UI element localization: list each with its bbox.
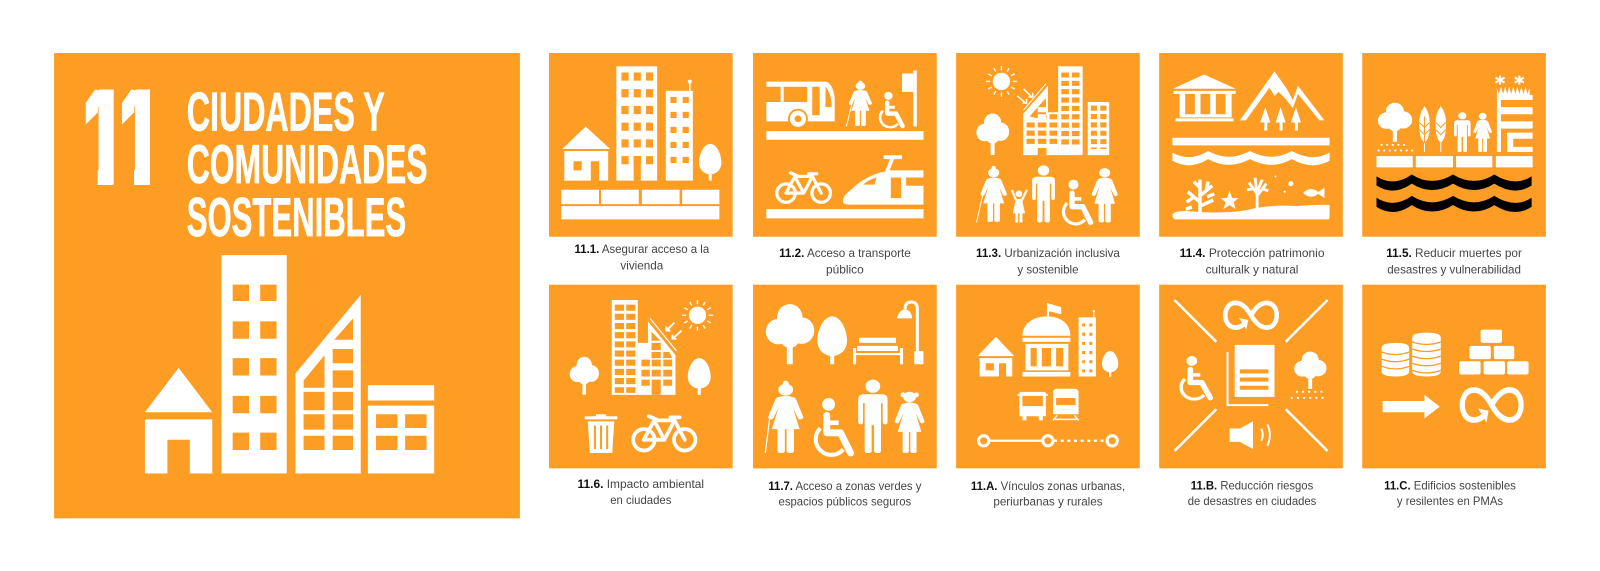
caption 11.7: 11.7. Acceso a zonas verdes y	[768, 480, 922, 493]
icon: wheelchair	[880, 92, 903, 127]
icon: speaker	[1230, 421, 1270, 449]
icon: train	[1053, 389, 1079, 420]
caption 11.1: 11.1. Asegurar acceso a la	[574, 243, 710, 256]
icon: trash bin	[585, 414, 617, 453]
icon: oval tree	[817, 316, 847, 364]
icon: star flowers	[1495, 76, 1524, 85]
icon: oval tree	[688, 358, 711, 395]
panel: 11.A	[956, 285, 1140, 468]
panel: 11.6	[549, 285, 733, 468]
icon: document	[1227, 345, 1274, 406]
icon: coral branch	[1247, 178, 1268, 209]
icon: arrow	[1383, 395, 1440, 418]
caption 11.B: 11.B. Reducción riesgos	[1191, 479, 1313, 492]
icon: capitol	[1022, 303, 1070, 377]
caption 11.3 line 2: y sostenible	[1017, 263, 1079, 276]
icon: fish	[1303, 188, 1324, 198]
icon: solar building	[612, 300, 677, 395]
icon: infinity	[1225, 303, 1277, 329]
icon: woman	[1092, 168, 1118, 222]
icon: woman with cane	[846, 81, 872, 127]
icon: man	[858, 380, 888, 453]
icon: city skyline	[145, 255, 434, 473]
icon: starfish	[1220, 191, 1239, 209]
icon: sun	[986, 66, 1017, 97]
icon: bus	[1017, 392, 1048, 420]
icon: house	[978, 337, 1014, 377]
icon: woman with cane	[765, 381, 803, 453]
icon: pavement	[561, 190, 719, 219]
icon: soil dots	[1378, 145, 1413, 151]
icon: apartment towers	[616, 66, 693, 181]
icon: street lamp	[897, 302, 923, 364]
icon: soil dots	[1291, 392, 1327, 398]
icon: tree	[699, 144, 721, 181]
icon: tree	[1294, 352, 1327, 389]
panel: 11.2	[753, 53, 937, 237]
icon: man	[1454, 112, 1471, 152]
icon: seabed	[1172, 205, 1330, 219]
icon: bus	[766, 82, 835, 129]
icon: woman	[1473, 113, 1492, 152]
panel: main goal 11	[54, 53, 520, 518]
icon: bench	[853, 338, 903, 364]
icon: train	[843, 157, 923, 205]
caption 11.C: 11.C. Edificios sostenibles	[1384, 479, 1516, 492]
icon: bricks	[1459, 330, 1529, 374]
heading: SOSTENIBLES	[187, 186, 406, 248]
caption 11.A: 11.A. Vínculos zonas urbanas,	[971, 480, 1125, 493]
caption 11.6: 11.6. Impacto ambiental	[578, 478, 704, 491]
caption 11.C line 2: y resilentes en PMAs	[1397, 495, 1503, 508]
heading: COMUNIDADES	[187, 133, 428, 195]
panel: 11.1	[549, 53, 733, 237]
icon: bus stop sign	[902, 70, 917, 127]
panel: 11.5	[1362, 53, 1546, 237]
caption 11.A line 2: periurbanas y rurales	[993, 496, 1103, 509]
icon: sun arrows	[1017, 89, 1033, 103]
caption 11.4 line 2: culturalk y natural	[1206, 263, 1298, 276]
icon: wave	[1172, 151, 1330, 165]
diagonal rays	[1174, 300, 1328, 451]
icon: coral	[1186, 180, 1214, 212]
icon: tree	[1102, 351, 1118, 377]
icon: platform	[766, 209, 923, 218]
heading	[187, 81, 428, 248]
caption 11.3: 11.3. Urbanización inclusiva	[976, 247, 1120, 260]
icon: tower	[1079, 310, 1096, 377]
caption 11.2 line 2: público	[826, 263, 864, 276]
caption 11.2: 11.2. Acceso a transporte	[779, 247, 911, 260]
icon: tree	[570, 357, 599, 395]
icon: house	[562, 127, 610, 181]
caption 11.5: 11.5. Reducir muertes por	[1386, 247, 1522, 260]
icon: wheelchair	[1181, 356, 1210, 399]
icon: bicycle	[633, 416, 695, 450]
icon: black flood waves	[1377, 174, 1532, 212]
icon: solar buildings	[1023, 66, 1109, 155]
icon: bicycle	[777, 173, 830, 202]
icon: tree	[976, 113, 1009, 155]
icon: child with raised arms	[1012, 191, 1027, 222]
panel: 11.7	[753, 285, 937, 468]
panel: 11.B	[1159, 285, 1343, 468]
panel: 11.C	[1362, 285, 1546, 468]
caption 11.B line 2: de desastres en ciudades	[1188, 495, 1316, 508]
caption 11.6 line 2: en ciudades	[610, 494, 672, 507]
icon: wheelchair	[816, 398, 851, 455]
icon: girl	[895, 392, 924, 453]
icon: sun	[682, 300, 713, 331]
icon: coin stacks	[1382, 333, 1441, 377]
icon: pavement	[1377, 156, 1533, 167]
icon: bubbles	[1274, 176, 1293, 193]
icon: wheat	[1419, 106, 1446, 152]
icon: large tree	[766, 304, 814, 364]
icon: tree	[1378, 103, 1412, 142]
icon: infinity	[1462, 390, 1521, 422]
heading: CIUDADES Y	[187, 81, 385, 143]
icon: green building	[1497, 87, 1533, 152]
icon: man	[1032, 165, 1055, 222]
caption 11.7 line 2: espacios públicos seguros	[779, 496, 911, 509]
icon: temple	[1173, 74, 1236, 121]
icon: woman with cane	[977, 166, 1007, 222]
goal number: 11	[71, 61, 174, 215]
panel: 11.3	[956, 53, 1140, 237]
panel: 11.4	[1159, 53, 1343, 237]
caption 11.1 line 2: vivienda	[620, 259, 664, 272]
caption 11.4: 11.4. Protección patrimonio	[1180, 247, 1325, 260]
icon: wheelchair	[1063, 180, 1091, 224]
icon: route line	[979, 436, 1117, 446]
icon: mountains	[1240, 71, 1324, 131]
icon: sun arrows	[666, 322, 682, 339]
caption 11.5 line 2: desastres y vulnerabilidad	[1387, 263, 1521, 276]
icon: platform	[766, 131, 923, 140]
icon: shoreline band	[1172, 138, 1330, 145]
